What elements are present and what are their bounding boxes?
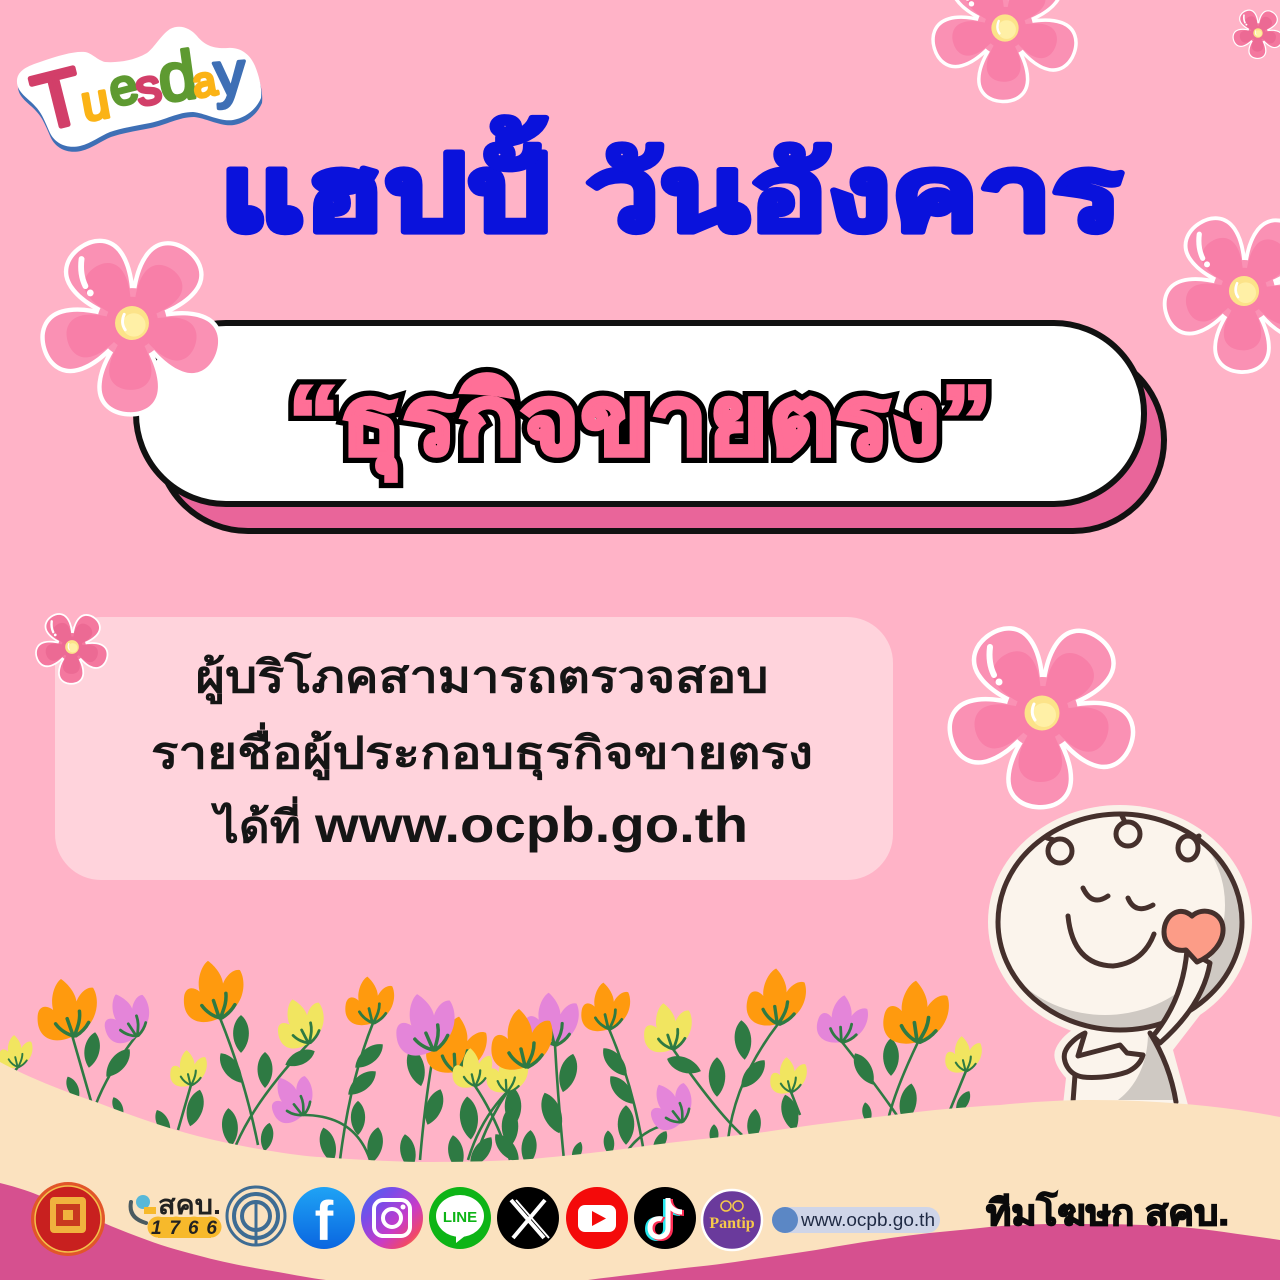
character arm bbox=[1064, 1033, 1143, 1077]
website pill: www.ocpb.go.th bbox=[800, 1210, 935, 1230]
character body bbox=[1072, 1030, 1176, 1105]
website pill bbox=[772, 1207, 940, 1233]
icon: สคบ 1766 bbox=[131, 1190, 222, 1239]
icon: CP logo bbox=[227, 1187, 285, 1245]
title: แฮปปั้ วันอังคาร bbox=[220, 116, 1122, 253]
team credit: ทีมโฆษก สคบ. bbox=[986, 1191, 1229, 1233]
tuesday sticker: s bbox=[130, 57, 166, 117]
tuesday sticker: e bbox=[103, 57, 143, 118]
character raised arm bbox=[1153, 950, 1210, 1043]
icon: facebook: f bbox=[315, 1189, 334, 1252]
panel: headline pill bbox=[136, 323, 1164, 531]
flower: left over pill bbox=[5, 197, 259, 449]
character holding heart bbox=[985, 795, 1252, 1105]
icon: x bbox=[497, 1187, 559, 1249]
flower meadow bbox=[0, 958, 982, 1172]
icon: line bbox=[429, 1187, 491, 1249]
icon: สคบ 1766: 1766 bbox=[151, 1218, 217, 1239]
flower: top centre bbox=[902, 0, 1107, 129]
icon: government seal bbox=[31, 1182, 105, 1256]
flower: info box corner bbox=[21, 596, 123, 698]
icon: pantip bbox=[702, 1190, 762, 1250]
icon: heart bbox=[1164, 911, 1223, 962]
flower: right of info box bbox=[911, 583, 1173, 843]
headline text: “ธุรกิจขายตรง” bbox=[288, 365, 992, 482]
icon: pantip: Pantip bbox=[709, 1215, 755, 1232]
flower: top right small bbox=[1223, 0, 1280, 68]
icon: instagram bbox=[361, 1187, 423, 1249]
tuesday sticker: a bbox=[188, 56, 220, 107]
tuesday sticker bbox=[17, 27, 262, 152]
info text line 3: www.ocpb.go.th bbox=[314, 797, 748, 853]
icon: youtube bbox=[566, 1187, 628, 1249]
character head bbox=[996, 812, 1244, 1032]
cream hill bbox=[0, 1062, 1280, 1280]
icon: line: LINE bbox=[443, 1209, 477, 1226]
panel: info box bbox=[55, 617, 893, 880]
tuesday sticker: T bbox=[24, 51, 92, 147]
headline text: “ธุรกิจขายตรง” bbox=[288, 365, 992, 482]
tuesday sticker: y bbox=[212, 39, 247, 110]
icon: สคบ 1766: สคบ. bbox=[158, 1190, 221, 1220]
icon: tiktok bbox=[634, 1187, 696, 1249]
info text line 2: รายชื่อผู้ประกอบธุรกิจขายตรง bbox=[151, 722, 813, 781]
tuesday sticker: d bbox=[153, 37, 201, 117]
flower: right bbox=[1131, 179, 1280, 403]
tuesday sticker: u bbox=[77, 72, 114, 132]
magenta bottom band bbox=[0, 1183, 1280, 1280]
character sticker outline bbox=[988, 805, 1252, 1105]
icon: facebook bbox=[293, 1187, 355, 1252]
info text line 3: ได้ที่ bbox=[211, 796, 301, 852]
info text line 1: ผู้บริโภคสามารถตรวจสอบ bbox=[196, 650, 768, 704]
logo bar bbox=[31, 1182, 940, 1256]
